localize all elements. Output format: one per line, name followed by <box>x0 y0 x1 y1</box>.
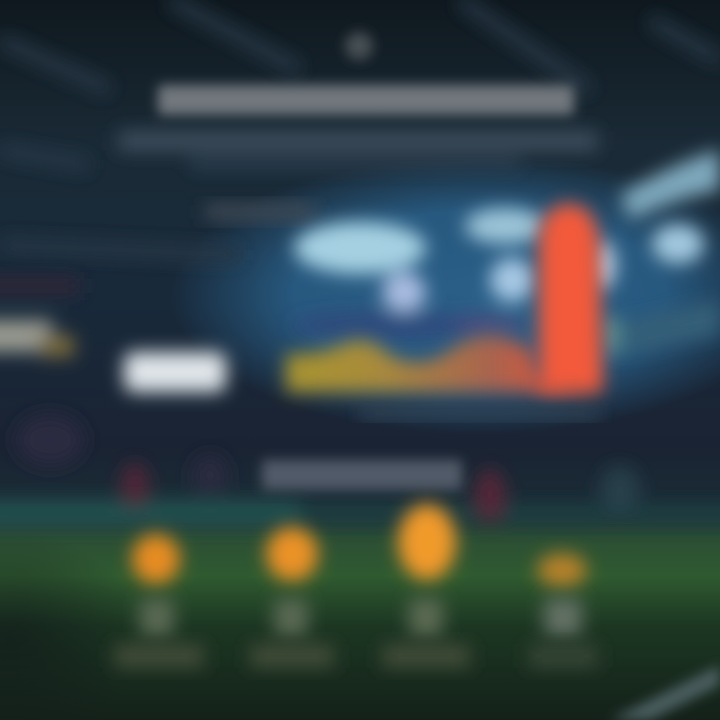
chart <box>286 204 621 418</box>
stat label <box>250 644 334 668</box>
stat column 1 <box>114 534 204 668</box>
orange circle <box>266 527 318 581</box>
stat label <box>528 644 598 668</box>
chart heading <box>205 204 315 220</box>
stat column 2 <box>250 527 334 668</box>
orange circle <box>537 553 587 587</box>
red peak bar <box>539 204 603 392</box>
orange circle <box>132 534 180 584</box>
stat number <box>544 598 582 636</box>
chart clouds <box>290 208 621 355</box>
orange circle <box>398 504 456 580</box>
area chart <box>286 336 600 392</box>
section heading <box>262 460 462 490</box>
stat label <box>114 644 204 668</box>
stat label <box>382 644 470 668</box>
subtitle <box>118 131 598 168</box>
left stat: logo <box>0 278 80 357</box>
stat number <box>140 598 174 636</box>
stat column 4 <box>528 553 598 668</box>
top icon <box>345 32 373 60</box>
stat column 3 <box>382 504 470 668</box>
stat number <box>409 598 443 636</box>
x axis labels <box>360 408 600 418</box>
stat number <box>274 598 308 636</box>
left stat: value <box>124 352 226 392</box>
title <box>158 85 574 115</box>
